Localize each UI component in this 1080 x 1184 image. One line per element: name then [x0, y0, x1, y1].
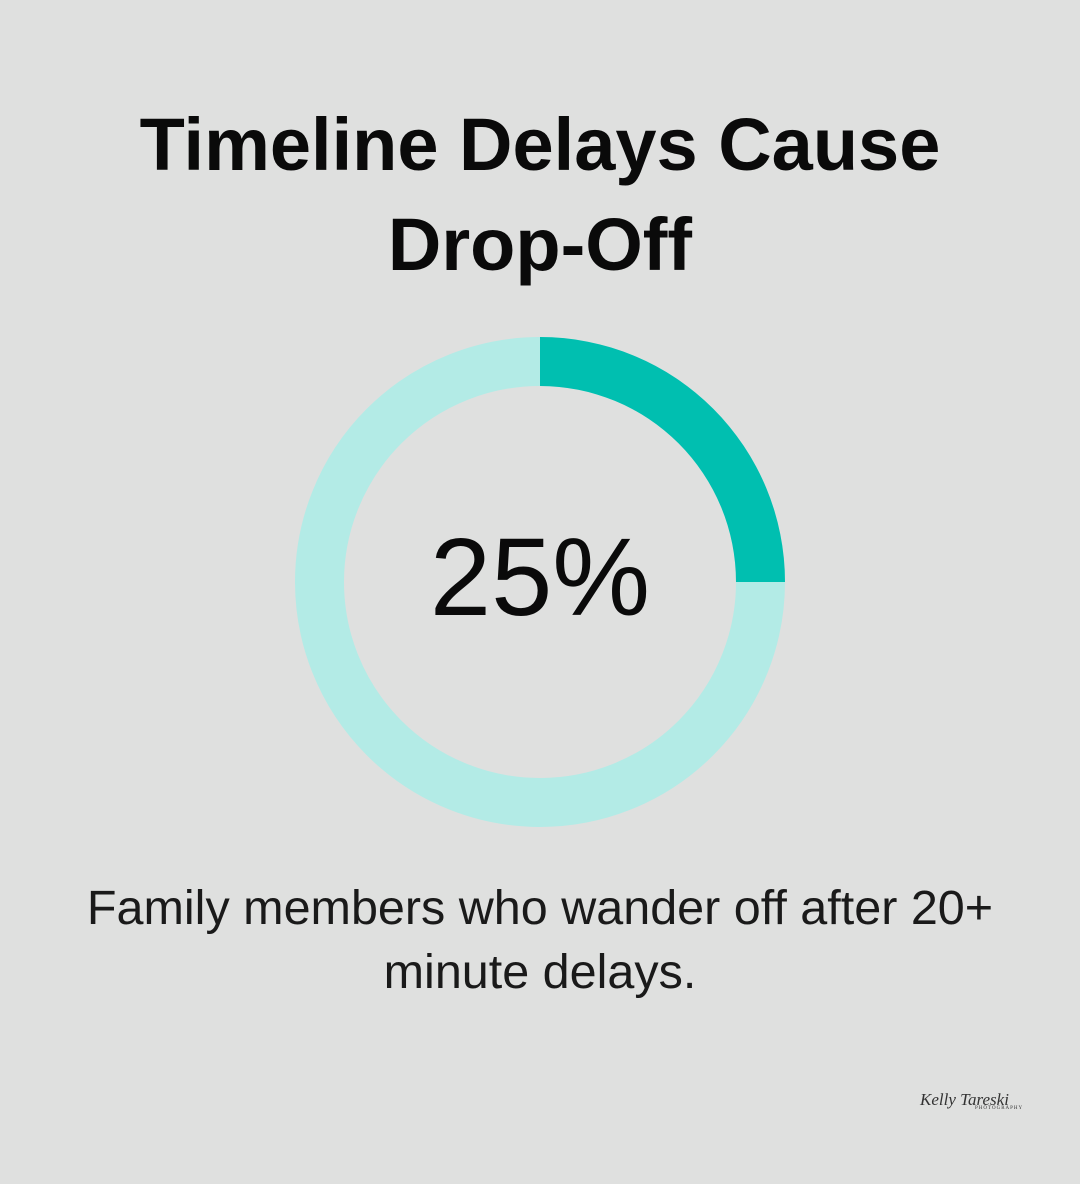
logo signature: PHOTOGRAPHY	[975, 1106, 1023, 1111]
caption: minute delays.	[384, 945, 696, 999]
caption	[87, 881, 993, 999]
title: Timeline Delays Cause	[140, 103, 940, 186]
percentage value: 25%	[430, 516, 650, 639]
title: Drop-Off	[388, 203, 692, 286]
logo signature: Kelly Tareski	[920, 1090, 1009, 1109]
title	[140, 103, 940, 286]
caption: Family members who wander off after 20+	[87, 881, 993, 935]
